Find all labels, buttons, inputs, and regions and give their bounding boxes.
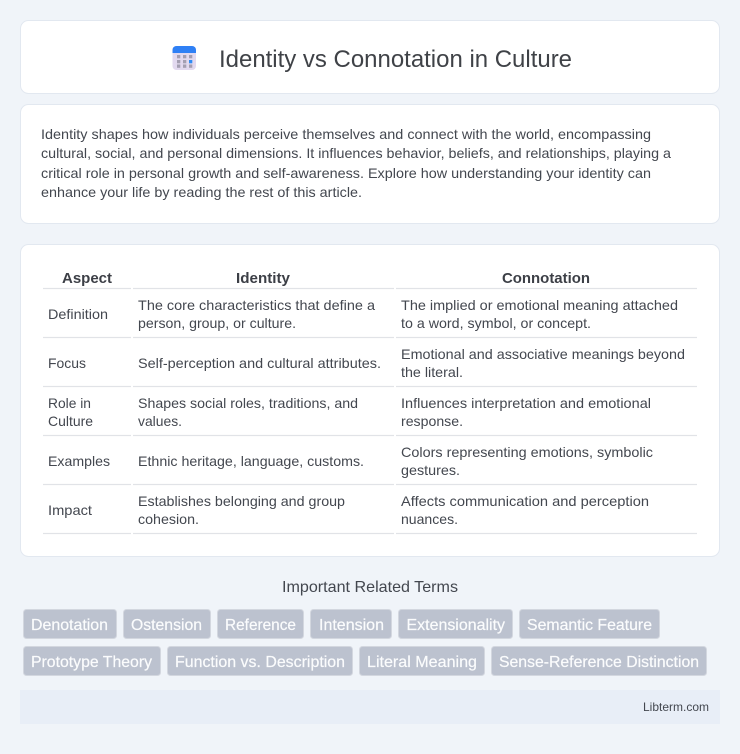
row: definition [48,297,678,331]
row: examples: Colors representing emotions, symbolic [401,444,653,460]
row: examples: Examples [48,453,110,469]
title: Identity vs Connotation in Culture [219,46,572,73]
table header row [62,270,590,287]
row: impact: Establishes belonging and group [138,493,345,509]
related term tags: Semantic Feature [527,617,652,634]
footer credit: Libterm.com [643,700,709,714]
row: focus: the literal. [401,364,463,380]
related term tags: Reference [225,617,296,634]
related term tags [24,610,706,676]
row: role in culture: response. [401,413,463,429]
row: impact [48,493,649,527]
row: impact: Affects communication and perception [401,493,649,509]
row: role in culture: Shapes social roles, traditions, and [138,395,358,411]
related term tags: Prototype Theory [31,654,152,671]
row: role in culture: Influences interpretation and emotional [401,395,651,411]
row: focus: Focus [48,355,86,371]
intro text block: cultural, social, and personal dimensions. It influences behavior, beliefs, and relationships, playing a [41,145,671,161]
table header row: Identity [236,270,291,287]
related term tags: Literal Meaning [367,654,477,671]
table header row: Aspect [62,270,112,287]
row: definition: to a word, symbol, or concept. [401,315,591,331]
related term tags: Ostension [131,617,202,634]
row: role in culture: values. [138,413,182,429]
header panel [20,20,720,94]
row: impact: nuances. [401,511,458,527]
row: examples: gestures. [401,462,460,478]
panel: intro paragraph [20,104,720,224]
row: definition: The core characteristics that define a [138,297,375,313]
intro text block [41,126,671,200]
row: definition: Definition [48,306,108,322]
row: role in culture: Culture [48,413,93,429]
row: role in culture: Role in [48,395,91,411]
row: impact: cohesion. [138,511,199,527]
row: role in culture [48,395,651,429]
related term tags: Sense-Reference Distinction [499,654,699,671]
related term tags: Extensionality [406,617,505,634]
intro text block: Identity shapes how individuals perceive themselves and connect with the world, encompassing [41,126,651,142]
row: focus: Self-perception and cultural attributes. [138,355,381,371]
related terms heading: Important Related Terms [282,579,458,596]
table header row: Connotation [502,270,590,287]
footer bar [20,690,720,724]
related term tags: Intension [319,617,384,634]
related term tags: Function vs. Description [175,654,345,671]
panel: comparison table [20,244,720,556]
row: examples: Ethnic heritage, language, customs. [138,453,364,469]
row: definition: person, group, or culture. [138,315,296,331]
related term tags: Denotation [31,617,108,634]
intro text block: critical role in personal growth and self-awareness. Explore how understanding your identity can [41,165,651,181]
intro text block: enhance your life by reading the rest of this article. [41,184,362,200]
row: definition: The implied or emotional meaning attached [401,297,678,313]
row: focus [48,346,685,380]
row: examples [48,444,653,478]
row: focus: Emotional and associative meanings beyond [401,346,685,362]
row: impact: Impact [48,502,92,518]
icon: calendar [172,46,196,70]
